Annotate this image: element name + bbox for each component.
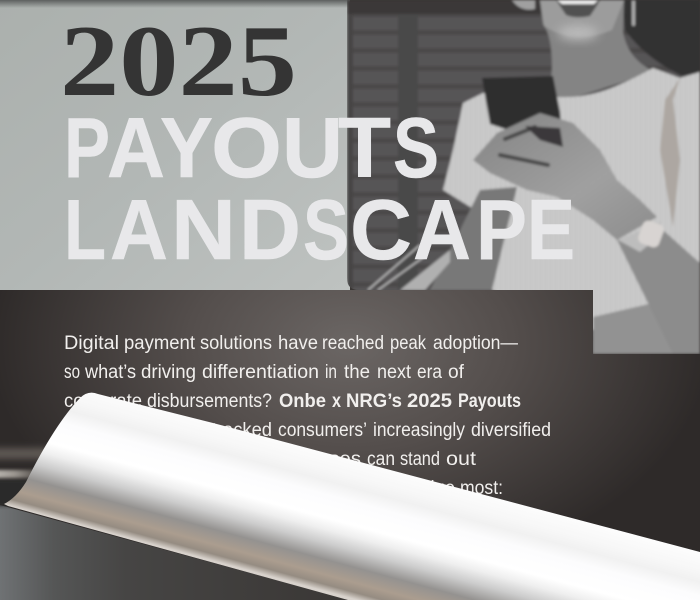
highlight: page fold shadow <box>0 448 50 506</box>
text block: introduction: what’s <box>84 362 136 383</box>
photo: earring <box>632 0 635 26</box>
heading: payouts: A <box>107 101 165 196</box>
text block: introduction: most: <box>460 478 503 499</box>
photo: hand <box>473 113 657 240</box>
heading: payouts <box>64 101 439 196</box>
text block: introduction: Landscape report tracked <box>64 420 272 441</box>
heading: landscape: N <box>171 183 236 278</box>
text block: introduction: increasingly <box>373 420 465 441</box>
photo: hair <box>622 0 700 76</box>
photo: left arm <box>430 187 517 290</box>
text block: introduction: by delivering the experiences they <box>64 478 407 499</box>
heading: payouts: Y <box>160 101 213 196</box>
text block: introduction: in <box>325 362 337 383</box>
photo: forearm <box>617 230 700 354</box>
heading: payouts: U <box>282 101 343 196</box>
text block: introduction: value <box>411 478 455 499</box>
heading: payouts: O <box>211 101 282 196</box>
text block: introduction: adoption— <box>433 333 518 354</box>
photo: shadow between fingers <box>500 127 548 165</box>
photo: mouth <box>556 0 600 17</box>
heading: landscape: P <box>476 183 527 278</box>
heading: landscape: A <box>110 183 168 278</box>
text block: introduction: diversified <box>471 420 551 441</box>
photo: lower face <box>540 0 624 37</box>
text block: introduction: next <box>377 362 412 383</box>
photo: phone <box>482 75 562 130</box>
photo: shopping bag <box>400 250 450 290</box>
text block: introduction: era <box>417 362 442 383</box>
photo: skirt <box>593 304 674 354</box>
text block: introduction <box>64 333 551 499</box>
text block: introduction: the <box>344 362 370 383</box>
text block: introduction: Onbe <box>279 391 326 412</box>
heading: landscape: L <box>64 183 106 278</box>
photo: shirt <box>443 68 700 330</box>
text block: introduction: peak <box>390 333 426 354</box>
page curl <box>4 393 700 600</box>
text block: introduction: consumers’ <box>278 420 367 441</box>
text block: introduction: can <box>367 449 395 470</box>
photo: bag handles <box>368 245 425 290</box>
photo: woman using smartphone <box>347 0 700 354</box>
photo: shoulder strap <box>660 78 680 227</box>
text block: introduction: driving <box>141 362 196 383</box>
text block: introduction: so <box>64 362 80 383</box>
text block: introduction: NRG’s <box>346 391 402 412</box>
text block: introduction: stand <box>400 449 440 470</box>
heading: landscape: A <box>413 183 471 278</box>
photo: wristwatch <box>618 219 665 252</box>
text block: introduction: out <box>446 449 477 470</box>
text block: introduction: have <box>278 333 318 354</box>
text block: introduction: disbursements? <box>147 391 272 412</box>
panel: lower page background <box>0 505 360 600</box>
text block: introduction: Payouts <box>458 391 521 412</box>
text block: introduction: corporate <box>64 391 142 412</box>
heading: payouts: S <box>393 101 439 196</box>
text block: introduction: differentiation <box>202 362 319 383</box>
text block: introduction: 2025 <box>407 391 452 412</box>
heading: payouts: P <box>64 101 110 196</box>
heading: payouts: T <box>338 101 391 196</box>
text block: introduction: solutions <box>200 333 272 354</box>
heading: landscape: S <box>303 183 349 278</box>
panel: silver header background <box>0 0 350 290</box>
photo: chin highlight <box>558 26 598 40</box>
photo: face and neck <box>544 0 650 98</box>
heading: landscape: E <box>527 183 575 278</box>
text block: introduction: preferences and how businesses <box>64 449 361 470</box>
heading: landscape: D <box>239 183 301 278</box>
panel: dark text background <box>0 290 700 600</box>
text block: introduction: x <box>332 391 341 412</box>
heading: landscape: C <box>350 183 412 278</box>
text block: introduction: reached <box>322 333 384 354</box>
text block: introduction: payment <box>124 333 196 354</box>
text block: introduction: of <box>448 362 465 383</box>
text block: introduction: Digital <box>64 333 119 354</box>
heading: landscape <box>64 183 575 278</box>
heading: year: 2025 <box>60 5 297 118</box>
photo: phone lower edge shadow <box>525 126 563 147</box>
